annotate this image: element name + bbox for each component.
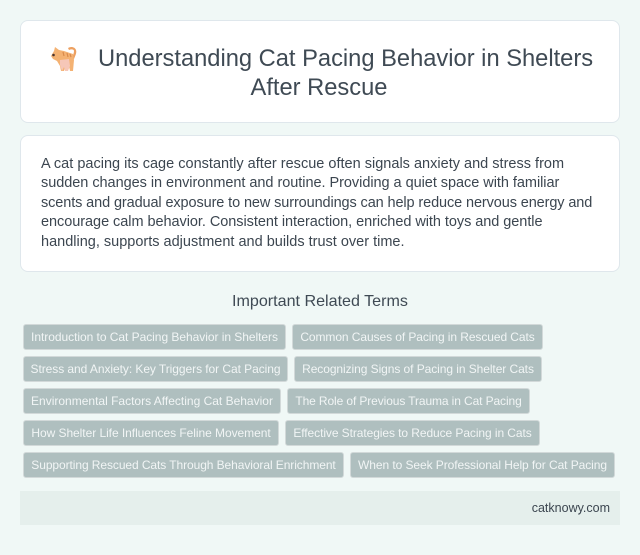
footer bar xyxy=(20,491,620,525)
tag: Introduction to Cat Pacing Behavior in Shelters xyxy=(31,330,278,344)
tag xyxy=(287,388,530,414)
tag xyxy=(23,388,281,414)
description text: sudden changes in environment and routine. Providing a quiet space with familiar xyxy=(41,175,559,191)
panel: title card xyxy=(20,20,620,123)
tag xyxy=(23,452,344,478)
tag: Supporting Rescued Cats Through Behavioral Enrichment xyxy=(31,458,336,472)
tag xyxy=(292,324,543,350)
description text: A cat pacing its cage constantly after rescue often signals anxiety and stress from xyxy=(41,156,564,172)
tag xyxy=(23,420,279,446)
icon: cat xyxy=(51,47,76,71)
tag: When to Seek Professional Help for Cat Pacing xyxy=(358,458,607,472)
tag xyxy=(350,452,615,478)
title: After Rescue xyxy=(251,75,387,101)
tag: How Shelter Life Influences Feline Movement xyxy=(31,426,271,440)
panel: description card xyxy=(20,135,620,272)
tag xyxy=(294,356,542,382)
tag: Environmental Factors Affecting Cat Behavior xyxy=(31,394,273,408)
tag xyxy=(23,356,288,382)
description text: scents and gradual exposure to new surroundings can help reduce nervous energy and xyxy=(41,194,592,210)
tag: Effective Strategies to Reduce Pacing in Cats xyxy=(293,426,532,440)
description text: handling, supports adjustment and builds trust over time. xyxy=(41,234,405,250)
description text: encourage calm behavior. Consistent interaction, enriched with toys and gentle xyxy=(41,214,542,230)
description text xyxy=(41,156,592,250)
tag: Recognizing Signs of Pacing in Shelter Cats xyxy=(302,362,534,376)
title: Understanding Cat Pacing Behavior in Shelters xyxy=(98,46,593,72)
tag: Common Causes of Pacing in Rescued Cats xyxy=(300,330,535,344)
tag: Stress and Anxiety: Key Triggers for Cat Pacing xyxy=(31,362,280,376)
footer bar: catknowy.com xyxy=(532,501,610,515)
tag xyxy=(23,324,286,350)
tag xyxy=(285,420,540,446)
title xyxy=(98,46,593,101)
tag: The Role of Previous Trauma in Cat Pacing xyxy=(295,394,522,408)
heading: related terms: Important Related Terms xyxy=(232,292,408,310)
